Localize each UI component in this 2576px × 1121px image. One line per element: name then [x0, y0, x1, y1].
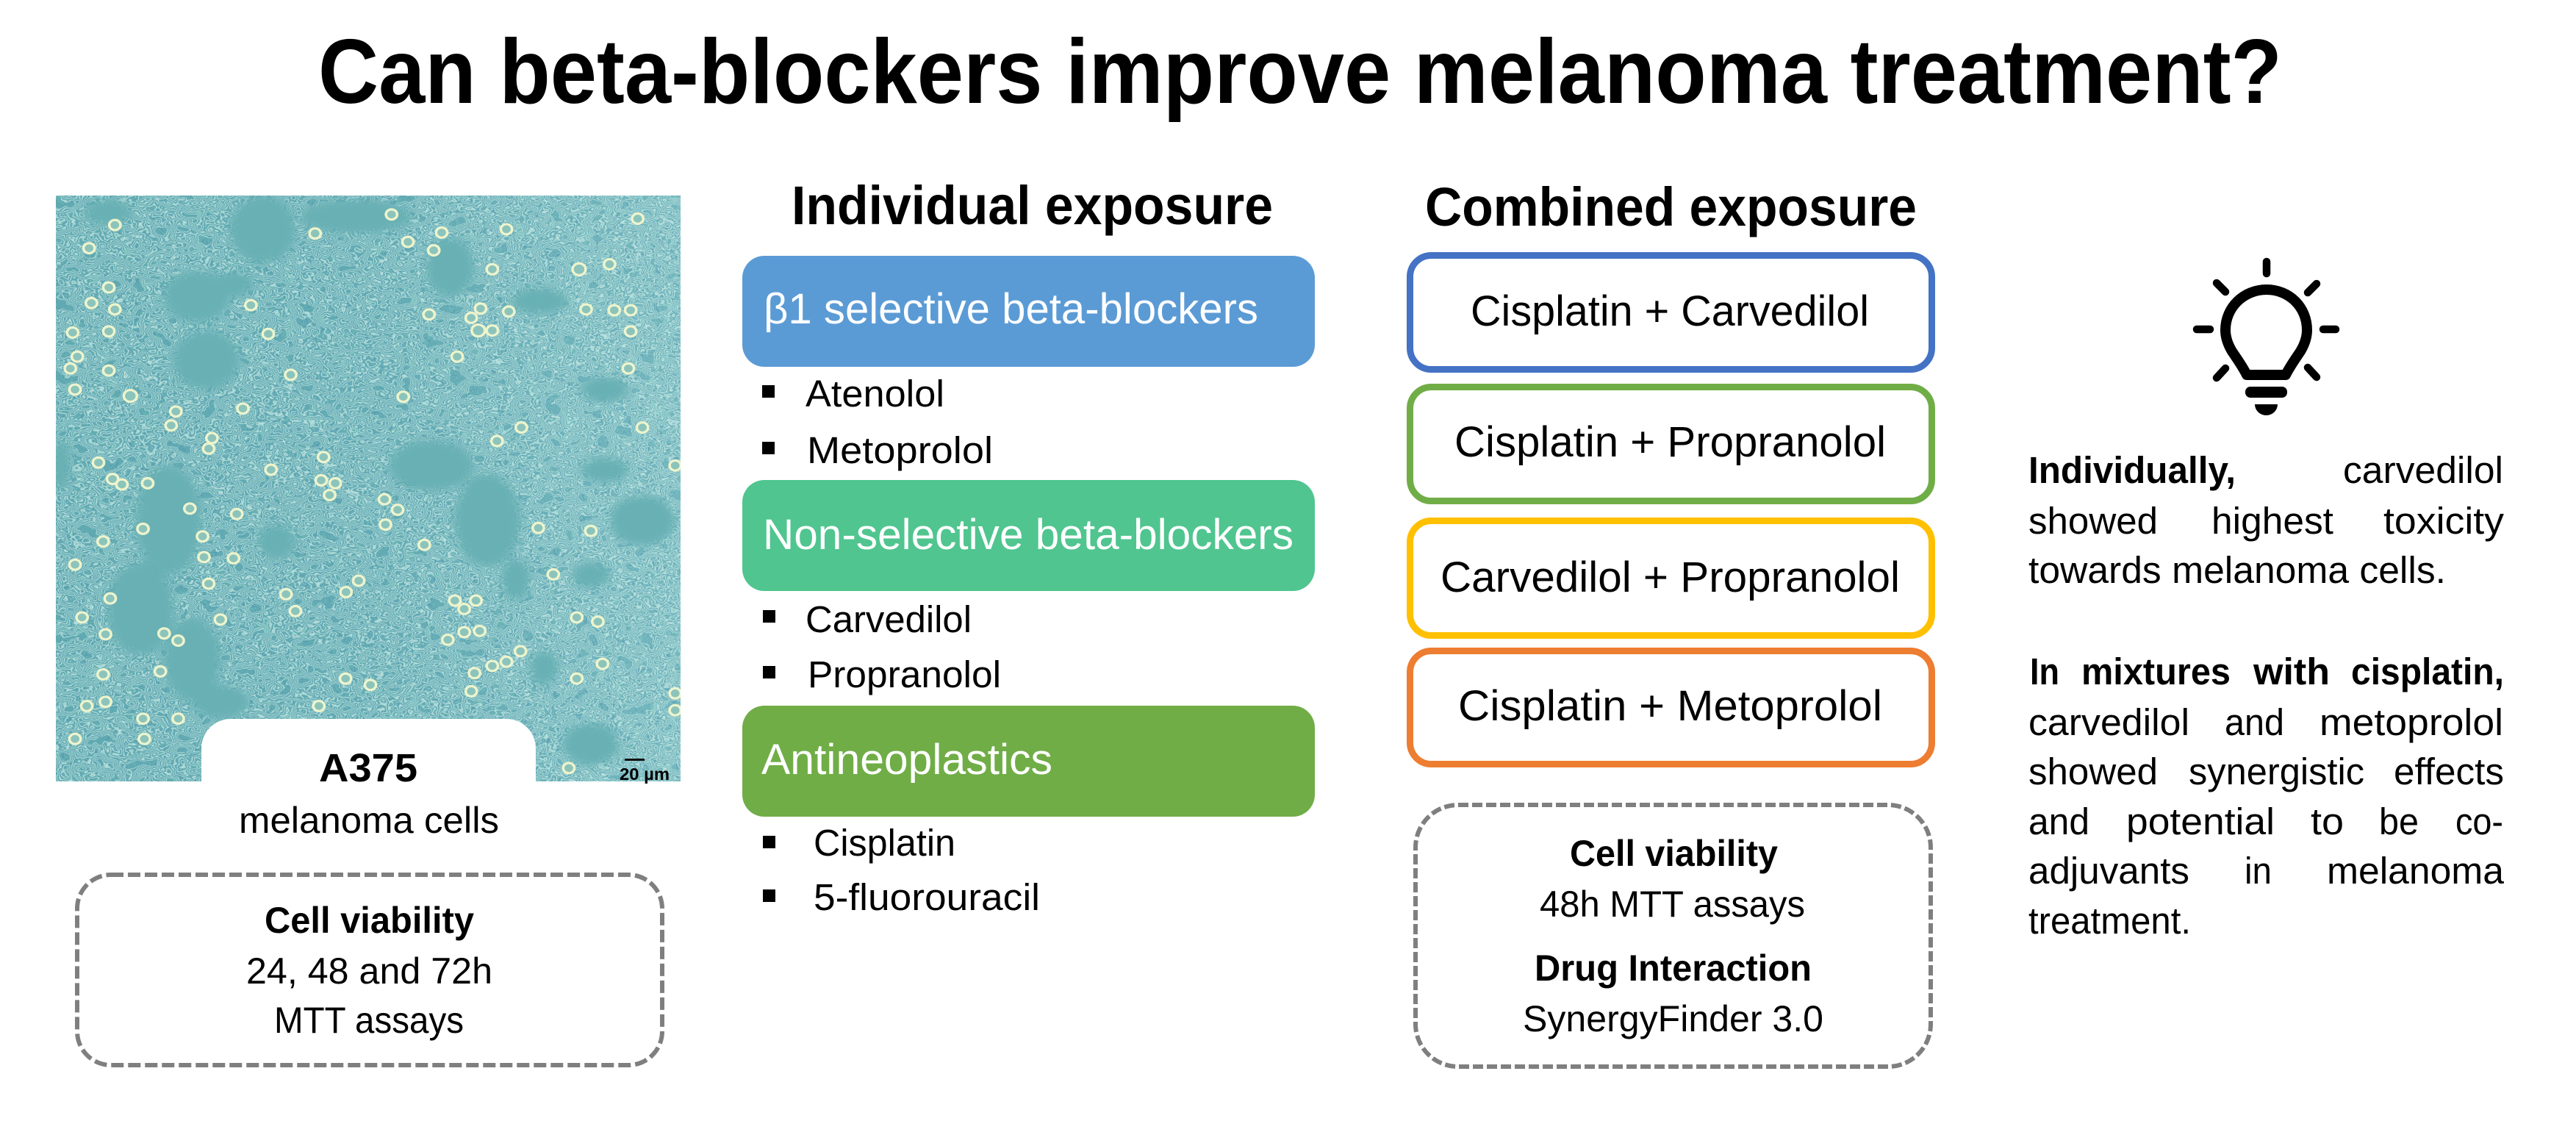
category: antineoplastics: Antineoplastics	[761, 736, 1052, 784]
heading: Combined exposure	[1425, 176, 1917, 237]
list item: Propranolol: Propranolol	[808, 653, 1001, 695]
combination: cisplatin + propranolol: Cisplatin + Propranolol	[1454, 418, 1886, 466]
text block: mixture finding: metoprolol	[2320, 701, 2503, 743]
text block: mixture finding: to	[2311, 801, 2344, 842]
assay type: MTT assays	[274, 1000, 464, 1041]
text block: mixture finding: and	[2225, 701, 2284, 743]
panel: A375 melanoma cells	[51, 196, 681, 841]
text block: individual finding: highest	[2211, 500, 2333, 542]
combination: cisplatin + metoprolol: Cisplatin + Metoprolol	[1458, 682, 1882, 730]
text block: individual finding: toxicity	[2383, 500, 2505, 542]
text block: mixture finding: and	[2028, 801, 2089, 842]
text block: individual finding: showed	[2028, 500, 2158, 542]
cell line name: A375	[319, 746, 417, 790]
combination: cisplatin + carvedilol: Cisplatin + Carvedilol	[1471, 287, 1869, 335]
dashed border	[77, 875, 662, 1065]
category: non-selective	[742, 480, 1315, 591]
text block: mixture finding	[2028, 651, 2505, 942]
category: non-selective: Non-selective beta-blockers	[763, 511, 1294, 559]
text block: mixture finding: synergistic	[2189, 751, 2364, 792]
list item: Carvedilol: Carvedilol	[806, 598, 972, 640]
cell viability method: 48h MTT assays	[1540, 884, 1805, 925]
dashed border	[1416, 805, 1931, 1067]
microscopy photo of A375 cells	[51, 196, 681, 781]
panel: combined exposure	[1410, 176, 1931, 764]
text block: mixture finding: be	[2379, 801, 2419, 842]
text block: individual finding: towards melanoma cells.	[2028, 549, 2446, 591]
time points: 24, 48 and 72h	[246, 950, 492, 992]
text block: individual finding	[2028, 449, 2505, 591]
title: Can beta-blockers improve melanoma treatment?	[318, 21, 2282, 123]
text block: individual finding: carvedilol	[2343, 449, 2503, 491]
text block: mixture finding: cisplatin,	[2351, 651, 2504, 692]
cell line description: melanoma cells	[239, 800, 499, 841]
text block: mixture finding: In	[2030, 651, 2059, 692]
panel: combined assays	[1416, 805, 1931, 1067]
combination: cisplatin + carvedilol	[1410, 256, 1931, 369]
list item: Atenolol: Atenolol	[806, 373, 944, 415]
list item: Cisplatin: Cisplatin	[814, 822, 955, 864]
text block: mixture finding: showed	[2028, 751, 2158, 792]
text block: mixture finding: melanoma	[2327, 850, 2505, 892]
category: beta-1 selective	[742, 256, 1315, 367]
text block: mixture finding: with	[2253, 651, 2330, 692]
list item: 5-fluorouracil: 5-fluorouracil	[814, 876, 1040, 918]
category: beta-1 selective: β1 selective beta-blockers	[764, 285, 1258, 333]
text block: mixture finding: co-	[2455, 801, 2503, 842]
text block: mixture finding: potential	[2126, 801, 2275, 842]
text block: mixture finding: treatment.	[2028, 900, 2191, 942]
text block: mixture finding: effects	[2394, 751, 2504, 792]
combination: cisplatin + metoprolol	[1410, 651, 1931, 764]
icon: light bulb	[2197, 262, 2336, 415]
combination: cisplatin + propranolol	[1410, 387, 1931, 501]
panel: cell viability assays	[77, 875, 662, 1065]
text block: mixture finding: adjuvants	[2028, 850, 2189, 892]
heading: Individual exposure	[792, 175, 1273, 236]
list item: Metoprolol: Metoprolol	[807, 429, 993, 471]
scale bar: 20 µm	[620, 764, 670, 784]
panel: individual exposure	[742, 175, 1315, 918]
text block: mixture finding: mixtures	[2081, 651, 2231, 692]
category: antineoplastics	[742, 706, 1315, 817]
cell viability heading: Cell viability	[1570, 833, 1778, 874]
white label tab	[201, 719, 536, 782]
combination: carvedilol + propranolol: Carvedilol + Propranolol	[1441, 554, 1900, 601]
drug interaction method: SynergyFinder 3.0	[1523, 998, 1823, 1039]
text block: mixture finding: carvedilol	[2028, 701, 2189, 743]
text block: individual finding: Individually,	[2028, 449, 2236, 491]
combination: carvedilol + propranolol	[1410, 520, 1931, 635]
text block: mixture finding: in	[2245, 850, 2272, 892]
assay heading: Cell viability	[265, 900, 474, 941]
drug interaction heading: Drug Interaction	[1535, 948, 1812, 989]
